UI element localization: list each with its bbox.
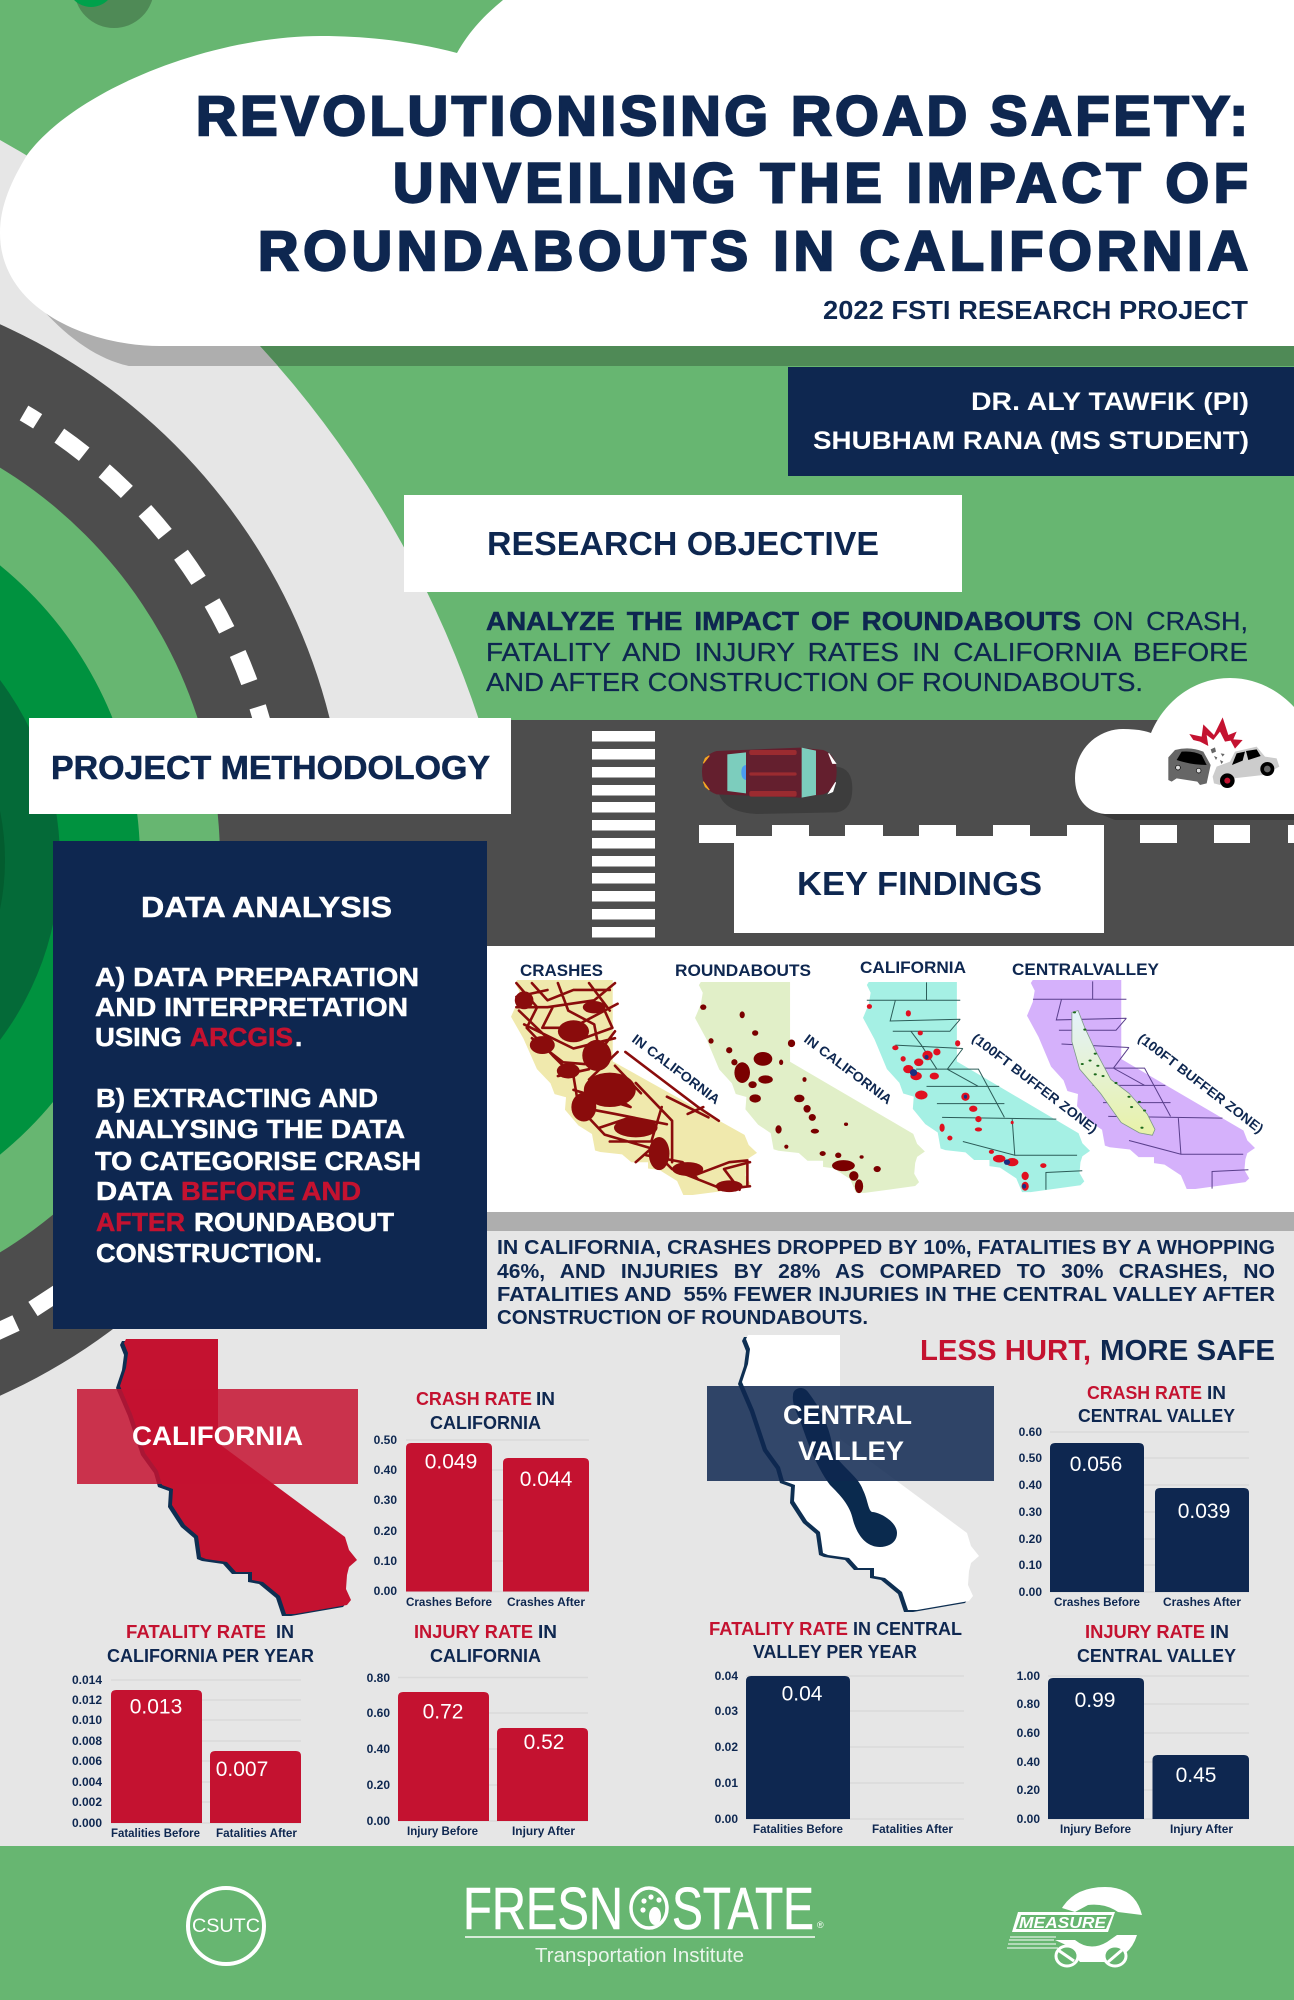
chart title: INJURY RATE [1085,1622,1205,1642]
panel: data analysis: DATA [96,1176,173,1206]
chart title [416,1389,555,1433]
chart: fatality rate in California: 0.012 [72,1693,102,1707]
panel: data analysis: ANALYSING THE DATA [95,1114,405,1144]
panel: data analysis: BEFORE AND [181,1176,361,1206]
research objective text: AND AFTER CONSTRUCTION OF ROUNDABOUTS. [486,667,1143,697]
chart: crash rate in California: 0.044 [520,1468,573,1491]
chart title: FATALITY RATE [126,1622,266,1642]
chart: crash rate in Central Valley: 0.30 [1019,1505,1042,1519]
chart: crash rate in Central Valley: Crashes After [1163,1597,1242,1609]
decorative tree at top [67,0,154,28]
logo: Fresno State Transportation Institute: FRESN [463,1876,623,1942]
chart: crash rate in Central Valley: 0.00 [1019,1585,1042,1599]
map labels [520,958,1160,980]
chart: injury rate in California: 0.80 [367,1671,390,1685]
chart: crash rate in California: 0.20 [374,1524,397,1538]
logo: CSUTC [188,1888,264,1964]
chart: injury rate in Central Valley: 0.80 [1017,1697,1040,1711]
panel: data analysis: ARCGIS [190,1022,293,1052]
panel: data analysis: TO CATEGORISE CRASH [95,1146,421,1176]
tagline: MORE SAFE [1100,1335,1275,1367]
chart: fatality rate in California: Fatalities Before [111,1828,200,1840]
logo: Fresno State Transportation Institute: Transportation Institute [535,1944,744,1967]
roundabout road and central island [0,273,347,1447]
chart: crash rate in Central Valley [1019,1383,1249,1609]
chart: fatality rate in California [72,1622,314,1840]
chart: fatality rate in Central Valley: 0.04 [715,1669,738,1683]
chart: fatality rate in California: 0.013 [130,1696,182,1718]
research objective text: ANALYZE THE IMPACT OF ROUNDABOUTS [486,606,1081,636]
chart: fatality rate in Central Valley: 0.04 [782,1682,823,1706]
chart: injury rate in California [367,1622,588,1838]
logo: Fresno State Transportation Institute [463,1876,824,1967]
chart title: CENTRAL VALLEY [1078,1406,1235,1426]
title [196,84,1248,282]
chart: fatality rate in Central Valley: Fatalities After [872,1824,954,1836]
California map with label [77,1339,358,1616]
authors panel: DR. ALY TAWFIK (PI) [971,388,1249,416]
chart: fatality rate in Central Valley: 0.03 [715,1704,738,1718]
title: UNVEILING THE IMPACT OF [393,151,1248,214]
key findings summary text: IN CALIFORNIA, CRASHES DROPPED BY 10%, FATALITIES BY A WHOPPING [497,1237,1275,1259]
chart: injury rate in Central Valley: 1.00 [1017,1669,1040,1683]
chart title: IN [276,1622,294,1642]
panel: data analysis: B) EXTRACTING AND [96,1083,378,1113]
chart title: CALIFORNIA [430,1646,541,1666]
chart: injury rate in Central Valley [1017,1622,1249,1836]
chart: fatality rate in California: 0.000 [72,1816,102,1830]
California map with label: CALIFORNIA [132,1421,303,1451]
panel: maps [487,946,1294,1231]
chart title: INJURY RATE [414,1622,533,1642]
chart: fatality rate in California: 0.007 [216,1758,268,1781]
chart title: CRASH RATE [1087,1383,1202,1403]
map labels: ROUNDABOUTS [675,961,811,980]
research objective heading: RESEARCH OBJECTIVE [487,525,879,562]
research objective text: ON CRASH, [1093,606,1248,636]
chart title: IN [1210,1622,1229,1642]
chart title: CENTRAL VALLEY [1077,1646,1236,1666]
chart: fatality rate in Central Valley: 0.02 [715,1740,738,1754]
logo: CSUTC: CSUTC [192,1916,260,1937]
map labels: CALIFORNIA [860,958,966,977]
authors panel [788,367,1294,476]
chart: injury rate in California: Injury After [512,1826,576,1838]
panel: data analysis: ROUNDABOUT [194,1207,394,1237]
chart title: IN [1207,1383,1226,1403]
panel: data analysis: AFTER [96,1207,185,1237]
chart: fatality rate in California: 0.008 [72,1734,102,1748]
chart title [1078,1383,1235,1426]
chart title: CALIFORNIA PER YEAR [107,1646,314,1666]
chart: crash rate in California: Crashes After [507,1597,586,1609]
logo: MEASURE [1007,1887,1142,1966]
chart title: IN [536,1389,555,1409]
chart: fatality rate in California: Fatalities After [216,1828,298,1840]
key findings heading [734,836,1104,933]
chart title [414,1622,557,1666]
tagline: LESS HURT, [920,1335,1091,1367]
chart title: IN [538,1622,557,1642]
panel: data analysis: A) DATA PREPARATION [95,962,419,992]
chart title [709,1619,962,1662]
chart: fatality rate in California: 0.004 [72,1775,102,1789]
chart: fatality rate in California: 0.014 [72,1673,102,1687]
chart: crash rate in California: 0.049 [425,1450,477,1474]
key findings summary text: CONSTRUCTION OF ROUNDABOUTS. [497,1307,868,1329]
map: roundabouts [695,982,925,1193]
Central Valley map with label: CENTRAL [783,1400,912,1430]
chart: crash rate in Central Valley: 0.039 [1178,1500,1230,1523]
key findings summary text [497,1237,1276,1329]
chart title: VALLEY PER YEAR [753,1642,917,1662]
rotated map captions: IN CALIFORNIA [629,1031,723,1107]
chart: injury rate in California: 0.52 [524,1731,564,1754]
chart: crash rate in California: Crashes Before [406,1597,492,1609]
panel: data analysis: AND INTERPRETATION [95,992,408,1022]
key findings heading: KEY FINDINGS [797,865,1042,902]
chart: crash rate in Central Valley: 0.056 [1070,1453,1122,1476]
map: crashes [511,980,757,1195]
chart: injury rate in Central Valley: 0.60 [1017,1726,1040,1740]
Central Valley map with label [707,1335,994,1612]
panel: data analysis [53,841,487,1329]
icon: car collision [1168,717,1279,788]
panel: data analysis: USING [95,1022,182,1052]
chart: injury rate in Central Valley: 0.20 [1017,1783,1040,1797]
panel: data analysis: . [295,1022,302,1052]
chart: crash rate in California: 0.30 [374,1493,397,1507]
chart: crash rate in California: 0.00 [374,1584,397,1598]
chart: injury rate in California: 0.20 [367,1778,390,1792]
panel: data analysis: CONSTRUCTION. [96,1238,322,1268]
map: Central Valley buffer [1027,980,1255,1189]
chart: injury rate in Central Valley: 0.00 [1017,1812,1040,1826]
chart title: CRASH RATE [416,1389,532,1409]
chart: crash rate in Central Valley: 0.40 [1019,1478,1042,1492]
map: California buffer [863,982,1090,1192]
project methodology heading: PROJECT METHODOLOGY [51,749,490,786]
authors panel: SHUBHAM RANA (MS STUDENT) [813,427,1249,455]
chart title: IN CENTRAL [853,1619,962,1639]
lane markings [699,825,1294,843]
chart: crash rate in Central Valley: 0.10 [1019,1558,1042,1572]
key findings summary text: FATALITIES AND 55% FEWER INJURIES IN THE CENTRAL VALLEY AFTER [497,1284,1276,1306]
chart: fatality rate in Central Valley: 0.00 [715,1812,738,1826]
road with crosswalk [300,720,1294,946]
footer band [0,1846,1294,2000]
chart: fatality rate in Central Valley: Fatalities Before [753,1824,843,1836]
rotated map captions [629,1030,1266,1136]
chart: injury rate in California: 0.40 [367,1742,390,1756]
logo: Fresno State Transportation Institute: ® [817,1920,824,1930]
chart: crash rate in California: 0.50 [374,1433,397,1447]
rotated map captions: IN CALIFORNIA [801,1031,895,1107]
chart: injury rate in California: 0.72 [423,1700,463,1724]
chart: fatality rate in California: 0.010 [72,1713,102,1727]
logo: MEASURE: MEASURE [1019,1915,1107,1932]
chart: crash rate in Central Valley: 0.60 [1019,1425,1042,1439]
key findings summary text: 46%, AND INJURIES BY 28% AS COMPARED TO 30% CRASHES, NO [497,1261,1275,1283]
research objective heading [404,495,962,592]
chart title [107,1622,314,1666]
chart: crash rate in California: 0.10 [374,1554,397,1568]
map labels: CENTRALVALLEY [1012,960,1160,979]
chart: injury rate in Central Valley: Injury Before [1060,1824,1131,1836]
tagline [920,1335,1275,1367]
icon: red car from above [702,748,852,814]
chart: injury rate in Central Valley: 0.40 [1017,1755,1040,1769]
chart title [1077,1622,1236,1666]
chart: fatality rate in California: 0.002 [72,1795,102,1809]
research objective text [486,606,1248,697]
chart: crash rate in Central Valley: 0.50 [1019,1451,1042,1465]
chart: crash rate in Central Valley: Crashes Before [1054,1597,1140,1609]
rotated map captions: (100FT BUFFER ZONE) [969,1030,1100,1136]
map labels: CRASHES [520,961,603,980]
chart: crash rate in Central Valley: 0.20 [1019,1532,1042,1546]
Central Valley map with label: VALLEY [798,1436,904,1466]
panel: data analysis: DATA ANALYSIS [141,892,392,924]
subtitle: 2022 FSTI RESEARCH PROJECT [823,295,1248,325]
header cloud [0,0,1294,366]
chart: fatality rate in Central Valley: 0.01 [715,1776,738,1790]
chart: crash rate in California [374,1389,589,1609]
title: ROUNDABOUTS IN CALIFORNIA [258,219,1248,282]
chart: injury rate in Central Valley: Injury After [1170,1824,1234,1836]
chart: injury rate in Central Valley: 0.99 [1075,1689,1115,1712]
crash cloud with collision icon [1075,678,1294,820]
logo: Fresno State Transportation Institute: STATE [672,1876,814,1942]
research objective text: FATALITY AND INJURY RATES IN CALIFORNIA BEFORE [486,637,1248,667]
project methodology heading [29,718,511,814]
chart title: CALIFORNIA [430,1413,541,1433]
chart: injury rate in Central Valley: 0.45 [1176,1764,1216,1787]
chart: fatality rate in Central Valley [709,1619,964,1836]
chart: injury rate in California: 0.60 [367,1706,390,1720]
title: REVOLUTIONISING ROAD SAFETY: [196,84,1248,147]
chart: injury rate in California: Injury Before [407,1826,478,1838]
chart: fatality rate in California: 0.006 [72,1754,102,1768]
crosswalk stripes [592,731,655,938]
chart: crash rate in California: 0.40 [374,1463,397,1477]
rotated map captions: (100FT BUFFER ZONE) [1135,1030,1266,1136]
chart: injury rate in California: 0.00 [367,1814,390,1828]
chart title: FATALITY RATE [709,1619,848,1639]
